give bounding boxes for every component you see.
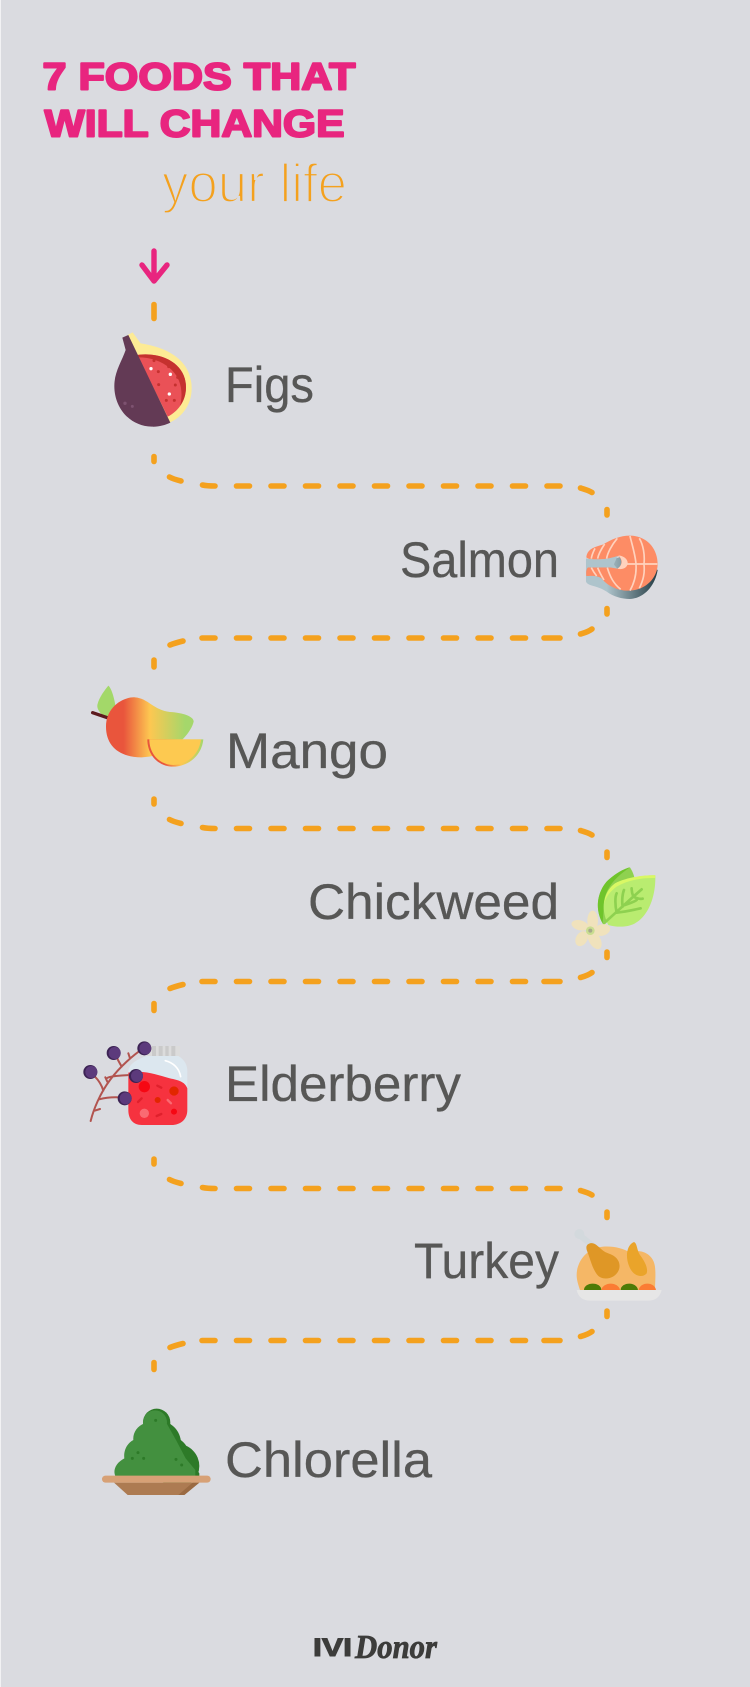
- title: [42, 56, 356, 146]
- label: Chlorella: Chlorella: [225, 1432, 432, 1488]
- subtitle: your life: [162, 152, 347, 214]
- label: Chickweed: Chickweed: [308, 874, 559, 930]
- title: WILL CHANGE: [44, 102, 344, 146]
- dashed path: [154, 304, 607, 1370]
- label: Mango: Mango: [226, 723, 388, 779]
- label: Elderberry: Elderberry: [225, 1056, 461, 1112]
- logo: Donor: [354, 1629, 438, 1666]
- icon: mango: [93, 686, 203, 767]
- logo: [313, 1629, 438, 1666]
- label: Figs: Figs: [225, 357, 314, 413]
- icon: chlorella powder: [102, 1409, 211, 1495]
- label: Turkey: Turkey: [414, 1233, 559, 1289]
- icon: chickweed: [570, 867, 655, 951]
- icon: elderberry jam: [83, 1041, 187, 1125]
- icon: fig: [114, 332, 192, 427]
- logo: IVI: [313, 1634, 352, 1662]
- arrow: [142, 251, 167, 281]
- title: 7 FOODS THAT: [42, 56, 356, 98]
- label: Salmon: Salmon: [400, 532, 559, 588]
- icon: salmon steak: [586, 536, 658, 599]
- icon: roast turkey: [574, 1229, 662, 1301]
